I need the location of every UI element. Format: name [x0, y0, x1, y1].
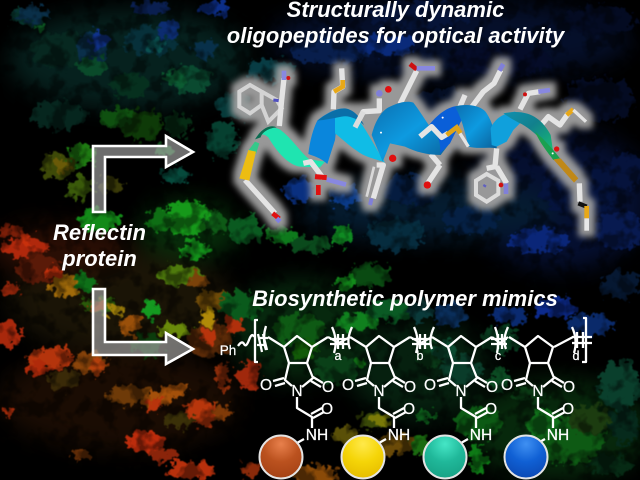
repeat unit c [424, 336, 498, 478]
repeat unit d: O [501, 377, 513, 394]
repeat unit b: O [404, 379, 416, 396]
repeat unit d: O [562, 401, 574, 418]
heading: polymer mimics: Biosynthetic polymer mimics [252, 286, 558, 311]
repeat unit a: O [260, 377, 272, 394]
sphere: brown [260, 436, 302, 478]
sphere: blue [504, 436, 548, 478]
repeat unit c: NH [470, 427, 492, 444]
title: oligopeptides for optical activity [227, 23, 566, 48]
top-right blues [284, 1, 640, 252]
repeat unit d [501, 336, 575, 478]
label: Reflectin protein [53, 220, 146, 271]
repeat unit d: NH [547, 427, 569, 444]
repeat unit a: O [321, 401, 333, 418]
repeat unit b: O [403, 401, 415, 418]
repeat unit c: O [424, 377, 436, 394]
right side teal, green and blue [492, 271, 640, 475]
repeat unit b: O [342, 377, 354, 394]
chain links and repeat labels: d [573, 349, 580, 363]
arrow: to helix [93, 136, 193, 212]
lower-left reds and oranges [0, 226, 337, 480]
repeat unit c: O [486, 379, 498, 396]
sphere: teal [424, 436, 466, 478]
repeat unit a: O [322, 379, 334, 396]
ribbon [239, 102, 578, 183]
helix molecule [239, 64, 587, 231]
repeat unit d: N [532, 383, 544, 400]
side chains in front of ribbon [303, 112, 587, 231]
side chains behind ribbon [239, 64, 586, 222]
end group Ph [220, 320, 268, 362]
repeat unit b [342, 336, 416, 478]
repeat unit a: NH [306, 427, 328, 444]
middle-left olive and green [41, 144, 352, 253]
repeat unit b: NH [388, 427, 410, 444]
label: Reflectin protein: protein [61, 246, 137, 271]
lower-centre greens and yellows [220, 263, 518, 474]
repeat unit a [260, 336, 334, 478]
top-left dim teal and navy [10, 1, 294, 158]
repeat unit d: O [563, 379, 575, 396]
repeat unit c: N [455, 383, 467, 400]
repeat unit b: N [373, 383, 385, 400]
repeat unit c: O [485, 401, 497, 418]
end group Ph: Ph [220, 343, 236, 358]
chain links and repeat labels [328, 318, 592, 363]
chain links and repeat labels: a [335, 349, 342, 363]
title [227, 0, 566, 48]
sphere: yellow [342, 436, 384, 478]
polymer structure [220, 318, 592, 478]
label: Reflectin protein: Reflectin [53, 220, 146, 245]
chain links and repeat labels: c [495, 349, 501, 363]
repeat unit a: N [291, 383, 303, 400]
chain links and repeat labels: b [417, 349, 424, 363]
arrow: to polymer [93, 289, 193, 364]
